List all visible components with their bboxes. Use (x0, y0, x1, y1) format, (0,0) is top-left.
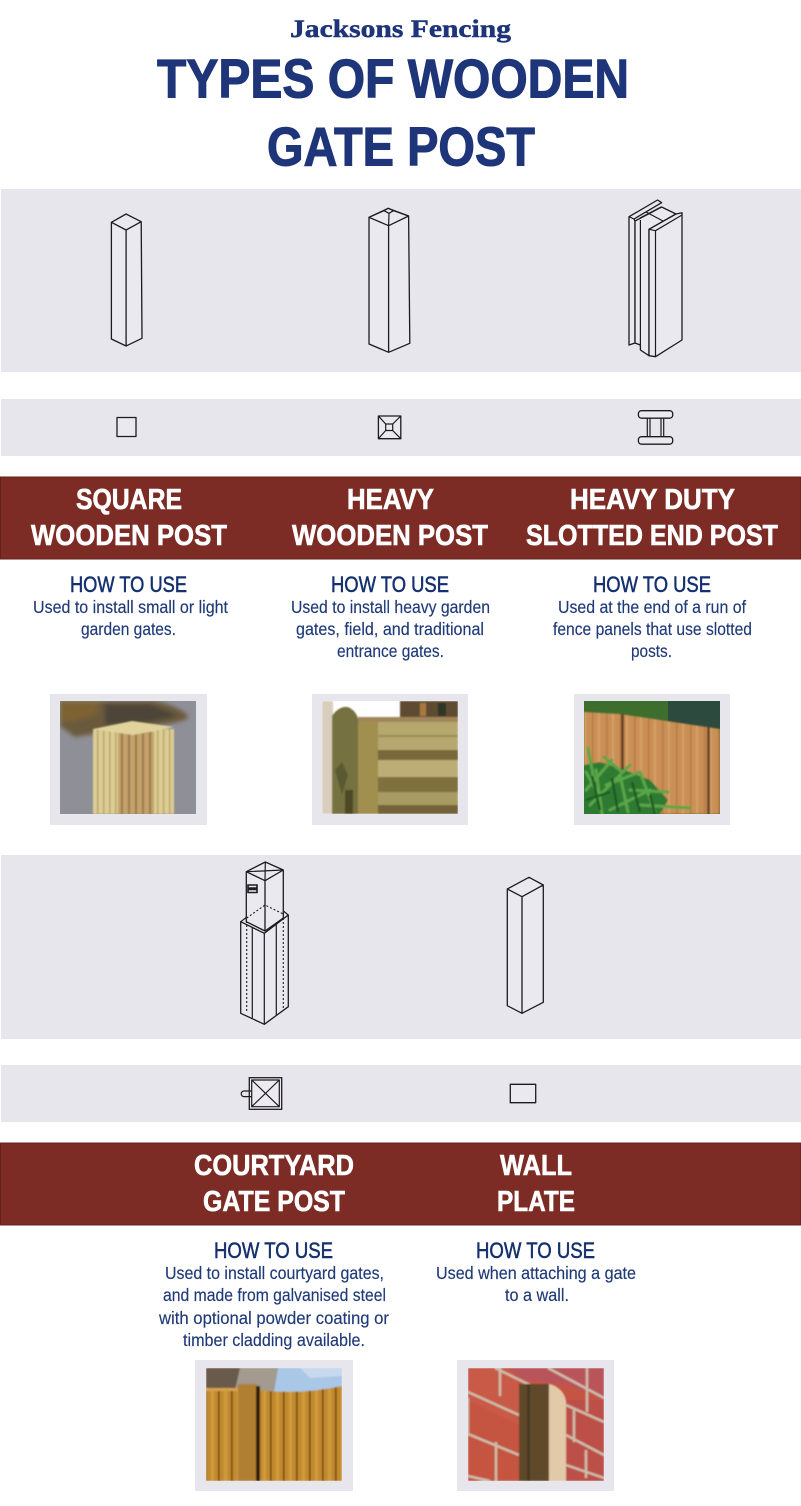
text: heavy post usage (291, 572, 490, 661)
text: courtyard post usage (158, 1238, 389, 1350)
heading: wall plate: PLATE (497, 1186, 575, 1218)
icon: wall plate section (510, 1084, 536, 1103)
icon: heavy post 3D (369, 208, 410, 352)
heading: heavy wooden post: WOODEN POST (292, 520, 489, 552)
text: square post usage: Used to install small or light (33, 597, 228, 617)
heading: courtyard gate post: GATE POST (203, 1186, 346, 1218)
text: square post usage (33, 572, 228, 639)
text: courtyard post usage: Used to install courtyard gates, (165, 1263, 384, 1283)
text: slotted post usage: HOW TO USE (593, 572, 711, 597)
text: courtyard post usage: HOW TO USE (214, 1238, 333, 1263)
icon: square post 3D (111, 214, 142, 346)
heading: heavy duty slotted end post: HEAVY DUTY (570, 484, 735, 516)
photo: square post (50, 694, 207, 825)
text: wall plate usage: to a wall. (505, 1285, 569, 1305)
heading: courtyard gate post: COURTYARD (194, 1150, 354, 1182)
panel: heading band one (0, 477, 801, 559)
text: slotted post usage: posts. (631, 641, 672, 661)
photo: heavy post on gate (312, 694, 468, 825)
text: heavy post usage: Used to install heavy garden (291, 597, 490, 617)
text: courtyard post usage: timber cladding available. (183, 1330, 365, 1350)
text: heavy post usage: HOW TO USE (331, 572, 449, 597)
text: square post usage: HOW TO USE (70, 572, 187, 597)
icon: wall plate 3D (507, 877, 543, 1013)
heading: square wooden post: WOODEN POST (31, 520, 228, 552)
photo: wall plate on brick (457, 1360, 614, 1491)
panel: lower cross-sections (1, 1065, 801, 1122)
text: wall plate usage (436, 1238, 636, 1305)
text: wall plate usage: Used when attaching a gate (436, 1263, 636, 1283)
text: heavy post usage: gates, field, and traditional (296, 619, 484, 639)
heading: wall plate: WALL (500, 1150, 572, 1182)
text: courtyard post usage: and made from galvanised steel (163, 1285, 386, 1305)
heading: square wooden post: SQUARE (76, 484, 182, 516)
icon: square section (117, 418, 136, 436)
text: courtyard post usage: with optional powder coating or (158, 1308, 389, 1328)
icon: slotted section (638, 411, 673, 444)
photo: courtyard gates (195, 1360, 353, 1491)
panel: top post drawings (1, 189, 801, 372)
panel: heading band two (0, 1143, 801, 1225)
text: wall plate usage: HOW TO USE (476, 1238, 595, 1263)
title: TYPES OF WOODEN (157, 48, 629, 110)
icon: courtyard section (241, 1078, 282, 1109)
brand name: Jacksons Fencing (290, 16, 512, 43)
photo: slotted post in fence (574, 694, 730, 825)
panel: top cross-sections (1, 399, 801, 456)
heading: heavy wooden post: HEAVY (347, 484, 434, 516)
text: slotted post usage: fence panels that use slotted (553, 619, 752, 639)
text: slotted post usage: Used at the end of a run of (558, 597, 746, 617)
text: heavy post usage: entrance gates. (337, 641, 444, 661)
icon: heavy section (378, 416, 401, 439)
title: GATE POST (267, 116, 535, 178)
icon: slotted post 3D (629, 200, 682, 357)
panel: lower post drawings (1, 855, 801, 1039)
text: slotted post usage (553, 572, 752, 661)
icon: courtyard gate post 3D (241, 862, 288, 1024)
title (157, 48, 629, 178)
text: square post usage: garden gates. (81, 619, 176, 639)
